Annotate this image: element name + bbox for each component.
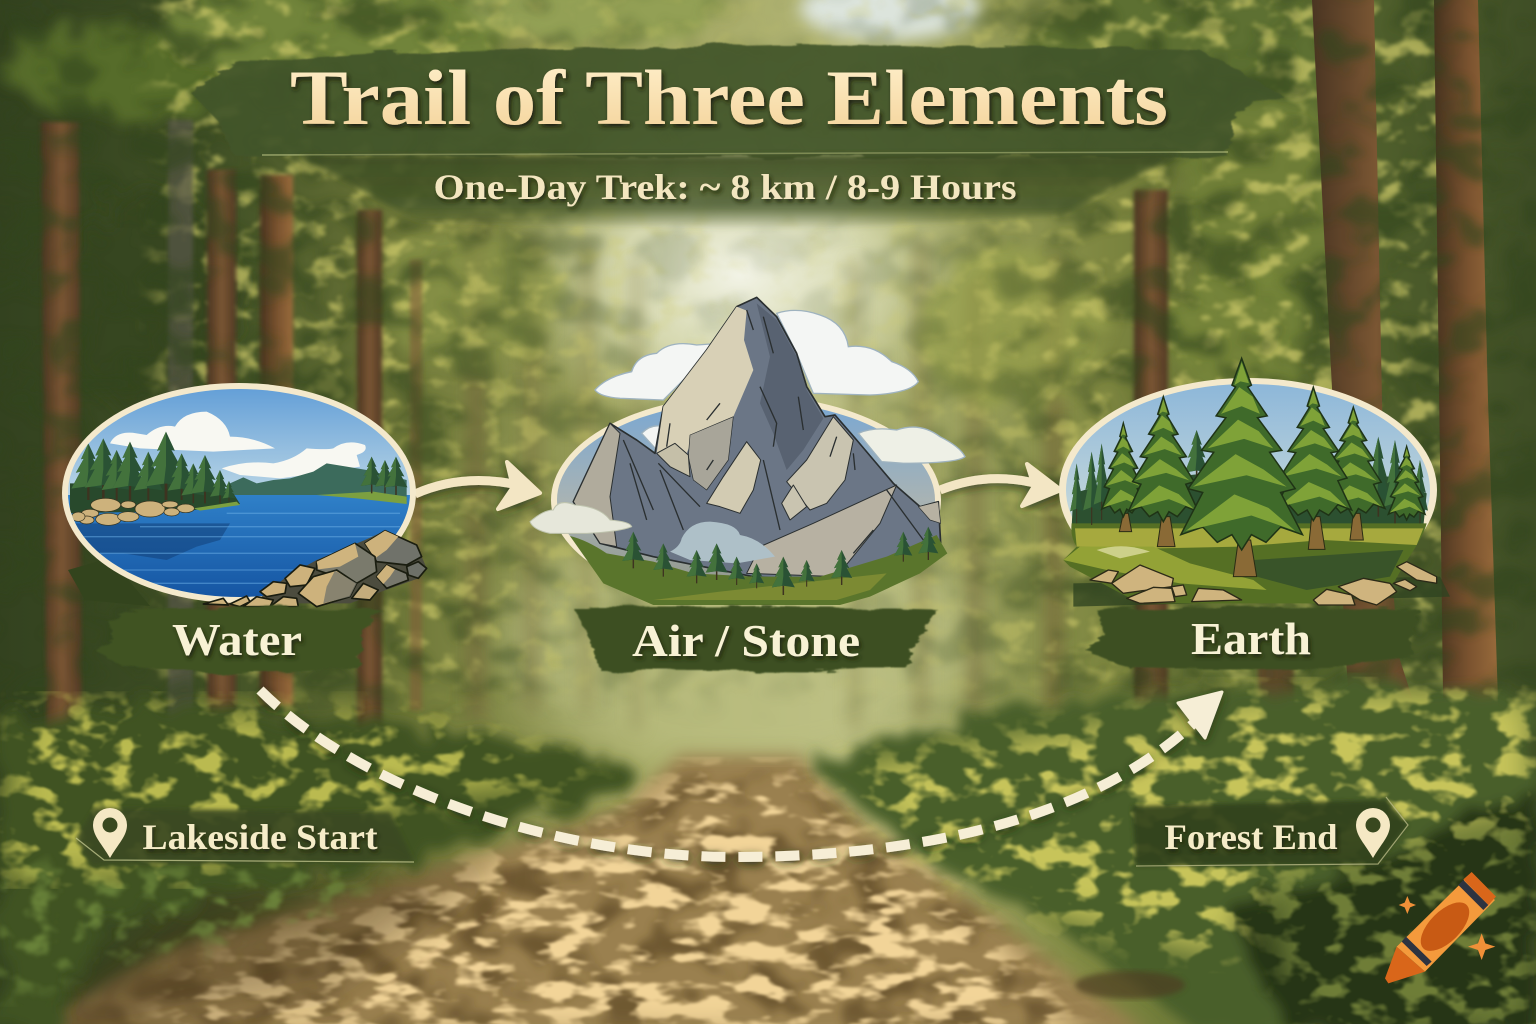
treeline	[570, 527, 947, 605]
dashed route arrow	[260, 690, 1222, 857]
end label: Forest End	[1164, 817, 1338, 857]
panel: earth	[1059, 358, 1450, 607]
panel: air / stone	[530, 297, 965, 605]
subtitle banner	[300, 154, 1180, 230]
mountain with clouds	[530, 297, 965, 605]
title banner	[190, 44, 1282, 158]
oval frame	[551, 395, 941, 605]
forest path and undergrowth	[0, 690, 1536, 1024]
label: water	[95, 606, 385, 673]
rocks	[1090, 562, 1437, 605]
end badge	[1132, 797, 1408, 866]
arrow: air to earth	[940, 464, 1061, 506]
oval frame	[1059, 378, 1437, 602]
title: Trail of Three Elements	[290, 54, 1168, 141]
icon: end pin	[1356, 808, 1390, 858]
start label: Lakeside Start	[142, 817, 378, 857]
label: earth	[1085, 606, 1420, 670]
subtitle: One-Day Trek: ~ 8 km / 8-9 Hours	[434, 167, 1016, 207]
label: earth: Earth	[1191, 613, 1311, 664]
rocks	[203, 531, 427, 607]
label: water: Water	[172, 614, 302, 665]
lake scene	[60, 380, 420, 610]
icon: crayon logo	[1385, 872, 1496, 983]
meadow and trees	[1063, 358, 1450, 607]
panel: water	[60, 380, 427, 610]
label: air / stone: Air / Stone	[632, 615, 860, 666]
label: air / stone	[573, 606, 938, 672]
start badge	[76, 808, 414, 866]
icon: start pin	[93, 808, 127, 858]
tree trunks	[0, 0, 1536, 790]
arrow: water to air	[415, 462, 540, 509]
